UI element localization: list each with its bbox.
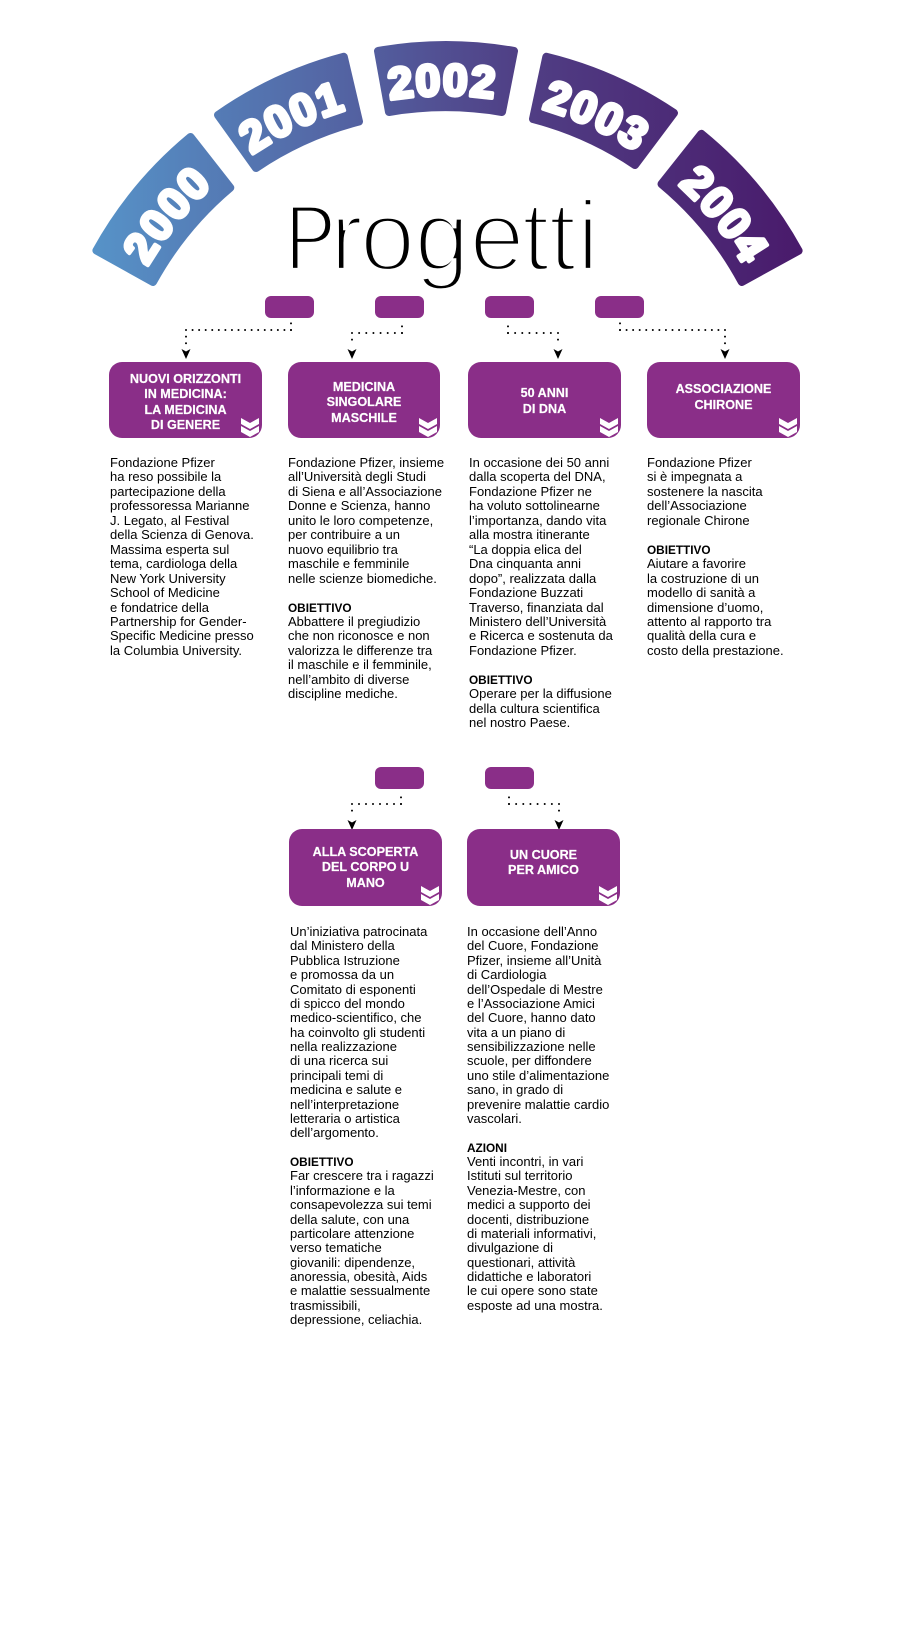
panel: Alla scoperta del corpo umano: [289, 767, 442, 1327]
heading text: UN CUORE: [510, 848, 577, 862]
text block: Fondazione Pfizer.: [469, 643, 577, 658]
heading text: MEDICINA: [333, 380, 395, 394]
text block: e l’Associazione Amici: [467, 996, 595, 1011]
text block: [288, 455, 444, 701]
text block: di una ricerca sui: [290, 1053, 388, 1068]
text block: della Scienza di Genova.: [110, 527, 254, 542]
panel: Associazione Chirone: [595, 296, 800, 658]
year tile: 2004: 2004: [677, 165, 770, 264]
text block: medico-scientifico, che: [290, 1010, 422, 1025]
text block: maschile e femminile: [288, 556, 409, 571]
text block: le cui opere sono state: [467, 1283, 598, 1298]
text block: vascolari.: [467, 1111, 522, 1126]
text block: J. Legato, al Festival: [110, 513, 229, 528]
text block: nuovo equilibrio tra: [288, 542, 398, 557]
heading text: 50 ANNI: [521, 386, 568, 400]
text block: e promossa da un: [290, 967, 394, 982]
heading text: LA MEDICINA: [144, 402, 227, 416]
year tag: [375, 767, 424, 789]
text block: ha coinvolto gli studenti: [290, 1025, 425, 1040]
text block: nella realizzazione: [290, 1039, 397, 1054]
text block: di materiali informativi,: [467, 1226, 596, 1241]
year tile: 2002: [374, 41, 518, 116]
text block: scuole, per diffondere: [467, 1053, 592, 1068]
arrow connector: [619, 322, 730, 359]
icon: chevrons: [421, 886, 439, 905]
text block: letteraria o artistica: [290, 1111, 400, 1126]
text block: divulgazione di: [467, 1240, 553, 1255]
heading text: IN MEDICINA:: [144, 387, 227, 401]
text block: Istituti sul territorio: [467, 1168, 572, 1183]
year tile: 2000: 2000: [124, 168, 209, 268]
text block: dalla scoperta del DNA,: [469, 469, 606, 484]
text block: di Siena e all’Associazione: [288, 484, 442, 499]
text block: discipline mediche.: [288, 686, 398, 701]
heading text: DI DNA: [523, 402, 566, 416]
text block: per contribuire a un: [288, 527, 400, 542]
text block: all’Università degli Studi: [288, 469, 426, 484]
text block: che non riconosce e non: [288, 628, 430, 643]
text block: verso tematiche: [290, 1240, 382, 1255]
icon: chevrons: [779, 418, 797, 437]
text block: Fondazione Pfizer: [647, 455, 752, 470]
arrow connector: [508, 796, 564, 829]
text block: professoressa Marianne: [110, 498, 249, 513]
heading text: ASSOCIAZIONE: [676, 382, 771, 396]
text block: nell’ambito di diverse: [288, 672, 409, 687]
text block: questionari, attività: [467, 1255, 575, 1270]
icon: chevrons: [599, 886, 617, 905]
text block: “La doppia elica del: [469, 542, 582, 557]
card heading: [647, 362, 800, 438]
card heading: [288, 362, 440, 438]
text block: principali temi di: [290, 1068, 383, 1083]
text block: Traverso, finanziata dal: [469, 600, 604, 615]
year tile: 2003: 2003: [541, 80, 649, 150]
text block: sensibilizzazione nelle: [467, 1039, 596, 1054]
text block: Fondazione Pfizer: [110, 455, 215, 470]
text block: alla mostra itinerante: [469, 527, 590, 542]
panel: Medicina singolare maschile: [288, 296, 444, 701]
year tile: 2000: [92, 133, 234, 286]
text block: nell’interpretazione: [290, 1096, 399, 1112]
text block: Venti incontri, in vari: [467, 1154, 583, 1169]
text block: OBIETTIVO: [288, 601, 352, 615]
text block: Abbattere il pregiudizio: [288, 614, 420, 629]
text block: attento al rapporto tra: [647, 614, 771, 629]
text block: e fondatrice della: [110, 600, 209, 615]
arrow connector: [507, 325, 562, 359]
text block: sano, in grado di: [467, 1082, 563, 1097]
text block: Un’iniziativa patrocinata: [290, 924, 427, 939]
text block: [469, 455, 613, 730]
year tag: [375, 296, 424, 318]
heading text: [130, 372, 241, 432]
text block: dal Ministero della: [290, 938, 395, 953]
text block: nelle scienze biomediche.: [288, 571, 437, 586]
text block: medicina e salute e: [290, 1082, 402, 1097]
text block: [290, 924, 434, 1327]
card heading: [468, 362, 621, 438]
text block: didattiche e laboratori: [467, 1269, 591, 1284]
text block: Fondazione Pfizer, insieme: [288, 455, 444, 470]
text block: dopo”, realizzata dalla: [469, 571, 596, 586]
heading text: [508, 848, 579, 877]
text block: e Ricerca e sostenuta da: [469, 628, 613, 643]
text block: del Cuore, Fondazione: [467, 938, 599, 953]
text block: Aiutare a favorire: [647, 556, 746, 571]
heading text: [312, 845, 418, 890]
text block: Venezia-Mestre, con: [467, 1183, 586, 1198]
text block: regionale Chirone: [647, 513, 750, 528]
text block: School of Medicine: [110, 585, 220, 600]
text block: [110, 455, 254, 658]
text block: uno stile d’alimentazione: [467, 1068, 609, 1083]
year tile: 2003: [529, 52, 678, 169]
heading text: PER AMICO: [508, 863, 579, 877]
heading text: MANO: [346, 876, 385, 890]
text block: consapevolezza sui temi: [290, 1197, 432, 1212]
text block: Pubblica Istruzione: [290, 953, 400, 968]
heading text: DI GENERE: [151, 418, 220, 432]
title: rogetti: [330, 180, 599, 291]
year tile: 2001: 2001: [238, 82, 346, 156]
text block: trasmissibili,: [290, 1298, 361, 1313]
text block: dell’Associazione: [647, 498, 747, 513]
panel: Un cuore per amico: [467, 767, 620, 1313]
text block: OBIETTIVO: [647, 543, 711, 557]
text block: l’importanza, dando vita: [469, 513, 606, 528]
text block: la Columbia University.: [110, 643, 242, 658]
arrow connector: [348, 796, 402, 829]
text block: Ministero dell’Università: [469, 614, 606, 629]
heading text: [676, 382, 771, 412]
text block: valorizza le differenze tra: [288, 643, 432, 658]
year tag: [485, 296, 534, 318]
text block: si è impegnata a: [647, 469, 742, 484]
text block: ha voluto sottolinearne: [469, 498, 600, 513]
text block: Massima esperta sul: [110, 542, 229, 557]
text block: In occasione dei 50 anni: [469, 455, 609, 470]
text block: In occasione dell’Anno: [467, 924, 597, 939]
arrow connector: [182, 322, 292, 359]
text block: Comitato di esponenti: [290, 982, 416, 996]
card heading: [109, 362, 262, 438]
heading text: [520, 386, 568, 416]
text block: Far crescere tra i ragazzi: [290, 1168, 434, 1183]
text block: tema, cardiologa della: [110, 556, 237, 571]
icon: chevrons: [241, 418, 259, 437]
text block: il maschile e il femminile,: [288, 657, 432, 672]
year tile: 2001: [214, 52, 363, 172]
year tile: 2004: [658, 130, 803, 286]
arrow connector: [348, 325, 403, 359]
text block: vita a un piano di: [467, 1025, 565, 1040]
text block: prevenire malattie cardio: [467, 1096, 609, 1112]
heading text: SINGOLARE: [327, 395, 401, 409]
text block: anoressia, obesità, Aids: [290, 1269, 427, 1284]
text block: giovanili: dipendenze,: [290, 1255, 415, 1270]
text block: ha reso possibile la: [110, 469, 221, 484]
year tag: [485, 767, 534, 789]
text block: di spicco del mondo: [290, 996, 405, 1011]
text block: della salute, con una: [290, 1212, 409, 1226]
title: P: [282, 188, 335, 291]
text block: esposte ad una mostra.: [467, 1298, 603, 1313]
text block: Partnership for Gender-: [110, 614, 247, 629]
text block: Fondazione Pfizer ne: [469, 484, 592, 499]
text block: dimensione d’uomo,: [647, 600, 763, 615]
card heading: [467, 829, 620, 906]
text block: dell’Ospedale di Mestre: [467, 982, 603, 996]
text block: Donne e Scienza, hanno: [288, 498, 430, 513]
text block: di Cardiologia: [467, 967, 546, 982]
heading text: NUOVI ORIZZONTI: [130, 372, 241, 386]
text block: particolare attenzione: [290, 1226, 414, 1241]
text block: e malattie sessualmente: [290, 1283, 430, 1298]
heading text: ALLA SCOPERTA: [313, 845, 418, 859]
heading text: MASCHILE: [331, 411, 397, 425]
year arch: [92, 41, 803, 291]
icon: chevrons: [600, 418, 618, 437]
year tag: [595, 296, 644, 318]
text block: l’informazione e la: [290, 1183, 395, 1198]
icon: chevrons: [419, 418, 437, 437]
text block: Dna cinquanta anni: [469, 556, 581, 571]
text block: dell’argomento.: [290, 1125, 379, 1140]
text block: Fondazione Buzzati: [469, 585, 583, 600]
text block: depressione, celiachia.: [290, 1312, 422, 1327]
card heading: [289, 829, 442, 906]
text block: Specific Medicine presso: [110, 628, 254, 643]
text block: qualità della cura e: [647, 628, 756, 643]
text block: del Cuore, hanno dato: [467, 1010, 596, 1025]
text block: [467, 924, 609, 1313]
text block: la costruzione di un: [647, 571, 759, 586]
text block: unito le loro competenze,: [288, 513, 433, 528]
text block: docenti, distribuzione: [467, 1212, 589, 1226]
text block: OBIETTIVO: [290, 1155, 354, 1169]
text block: AZIONI: [467, 1141, 507, 1155]
text block: modello di sanità a: [647, 585, 755, 600]
text block: OBIETTIVO: [469, 673, 533, 687]
text block: della cultura scientifica: [469, 701, 600, 716]
text block: [647, 455, 784, 658]
text block: partecipazione della: [110, 484, 226, 499]
text block: Pfizer, insieme all’Unità: [467, 953, 601, 968]
text block: New York University: [110, 571, 226, 586]
panel: 50 anni di DNA: [468, 296, 621, 730]
text block: sostenere la nascita: [647, 484, 763, 499]
heading text: DEL CORPO U: [322, 860, 409, 874]
text block: medici a supporto dei: [467, 1197, 591, 1212]
text block: costo della prestazione.: [647, 643, 784, 658]
heading text: [326, 380, 401, 425]
text block: nel nostro Paese.: [469, 715, 570, 730]
year tile: 2002: 2002: [387, 62, 496, 102]
panel: Nuovi orizzonti in medicina: [109, 296, 314, 658]
year tag: [265, 296, 314, 318]
heading text: CHIRONE: [694, 398, 753, 412]
text block: Operare per la diffusione: [469, 686, 612, 701]
